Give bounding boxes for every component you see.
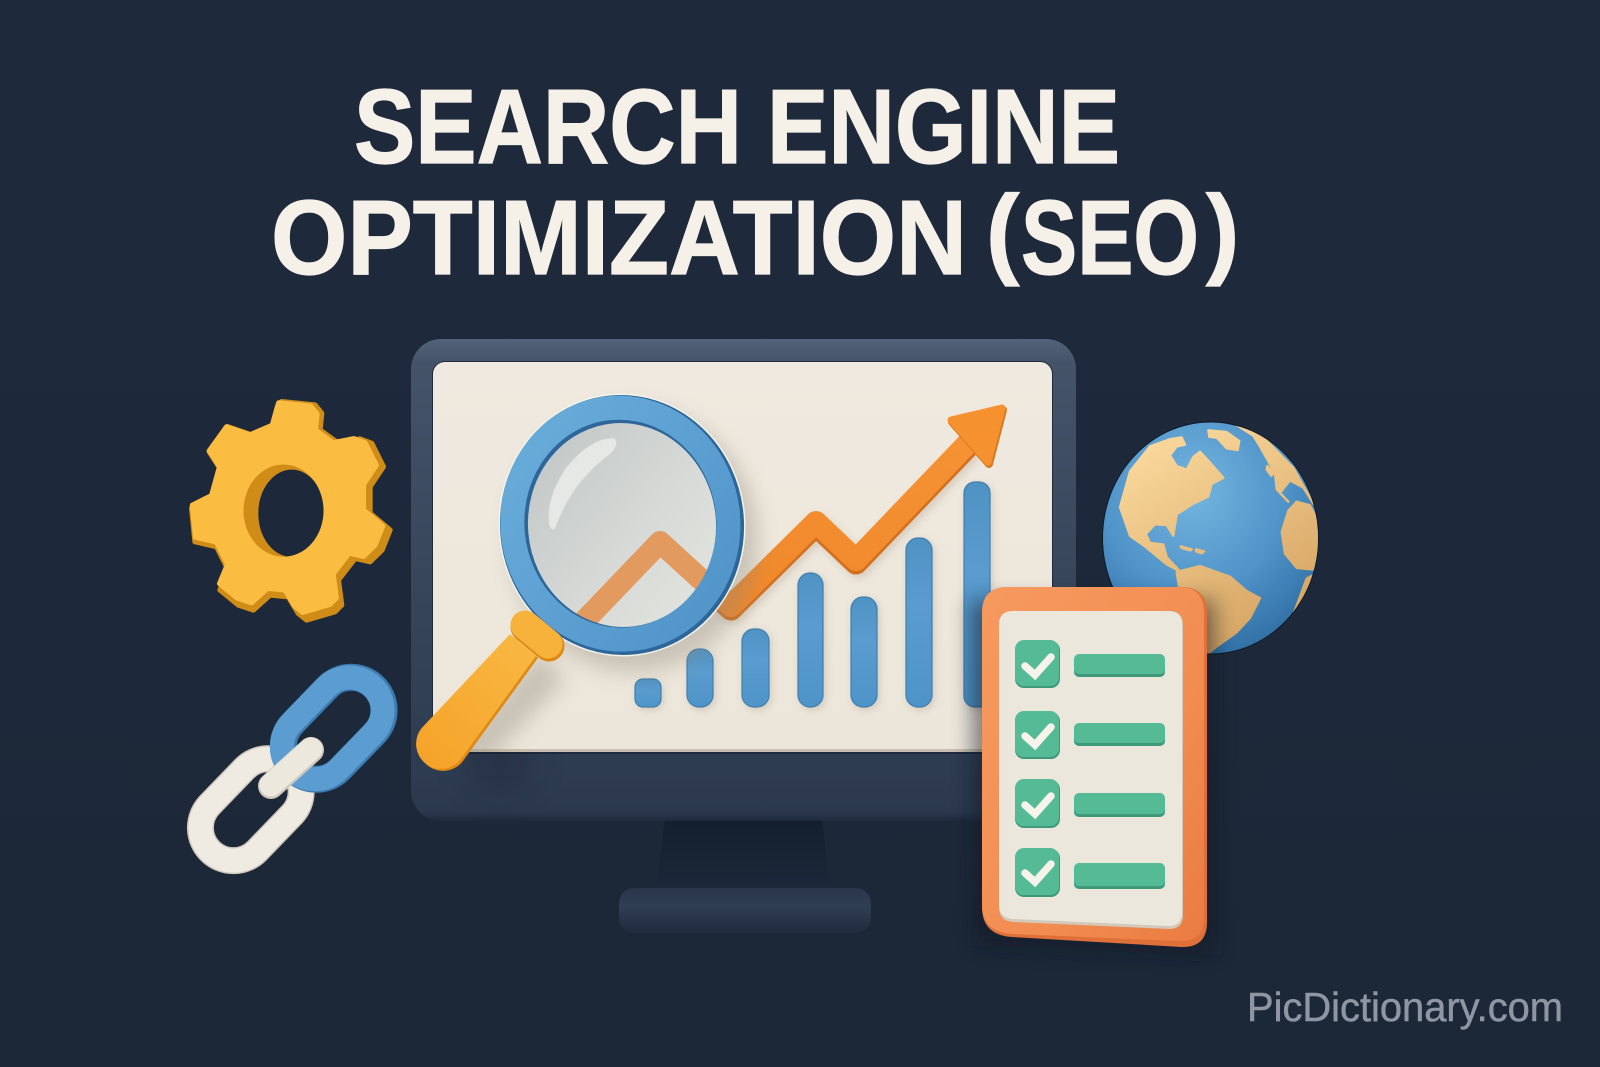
bars (635, 482, 990, 707)
chart line seen through lens (576, 531, 707, 623)
lens ring (503, 398, 741, 651)
card paper (999, 611, 1183, 929)
title: ENGINE (767, 68, 1120, 186)
monitor base (619, 888, 871, 933)
continent: south america (1177, 566, 1260, 657)
icon: globe (1102, 422, 1322, 657)
checklist row 4 (1015, 848, 1165, 897)
lens (516, 412, 728, 638)
white link front bar (271, 749, 311, 786)
icon: gear (192, 402, 390, 620)
magnifying glass (416, 398, 758, 771)
magnifier handle (416, 625, 549, 771)
checklist row 1 (1015, 640, 1165, 688)
card shadow (970, 600, 1215, 955)
white link (187, 745, 315, 874)
watermark: PicDictionary.com (1247, 984, 1563, 1030)
infographic canvas (186, 88, 1561, 1030)
checklist card (970, 587, 1215, 955)
bar chart (635, 482, 992, 710)
continent: europe (1237, 425, 1313, 504)
checklist row 3 (1015, 779, 1165, 828)
title: SEO (1021, 179, 1199, 297)
growth arrow (588, 408, 1003, 622)
continent: north america (1120, 437, 1223, 571)
monitor (411, 339, 1076, 933)
screen (432, 361, 1053, 754)
title: ) (1206, 175, 1239, 287)
lens highlight (549, 438, 616, 530)
title: OPTIMIZATION (271, 179, 967, 297)
monitor frame (411, 339, 1076, 821)
monitor stand (656, 818, 830, 890)
title: SEARCH (354, 68, 742, 186)
handle shadow on frame (480, 754, 519, 778)
blue link (268, 664, 398, 793)
continent: greenland (1208, 430, 1239, 450)
title: ( (986, 175, 1020, 287)
continent: africa (1282, 502, 1322, 570)
magnifier shadow (470, 410, 766, 752)
icon: chain link (187, 664, 398, 874)
islands (1181, 466, 1313, 614)
card frame (982, 587, 1207, 947)
bar shadows (637, 484, 992, 710)
title (271, 68, 1239, 297)
checklist row 2 (1015, 711, 1165, 759)
